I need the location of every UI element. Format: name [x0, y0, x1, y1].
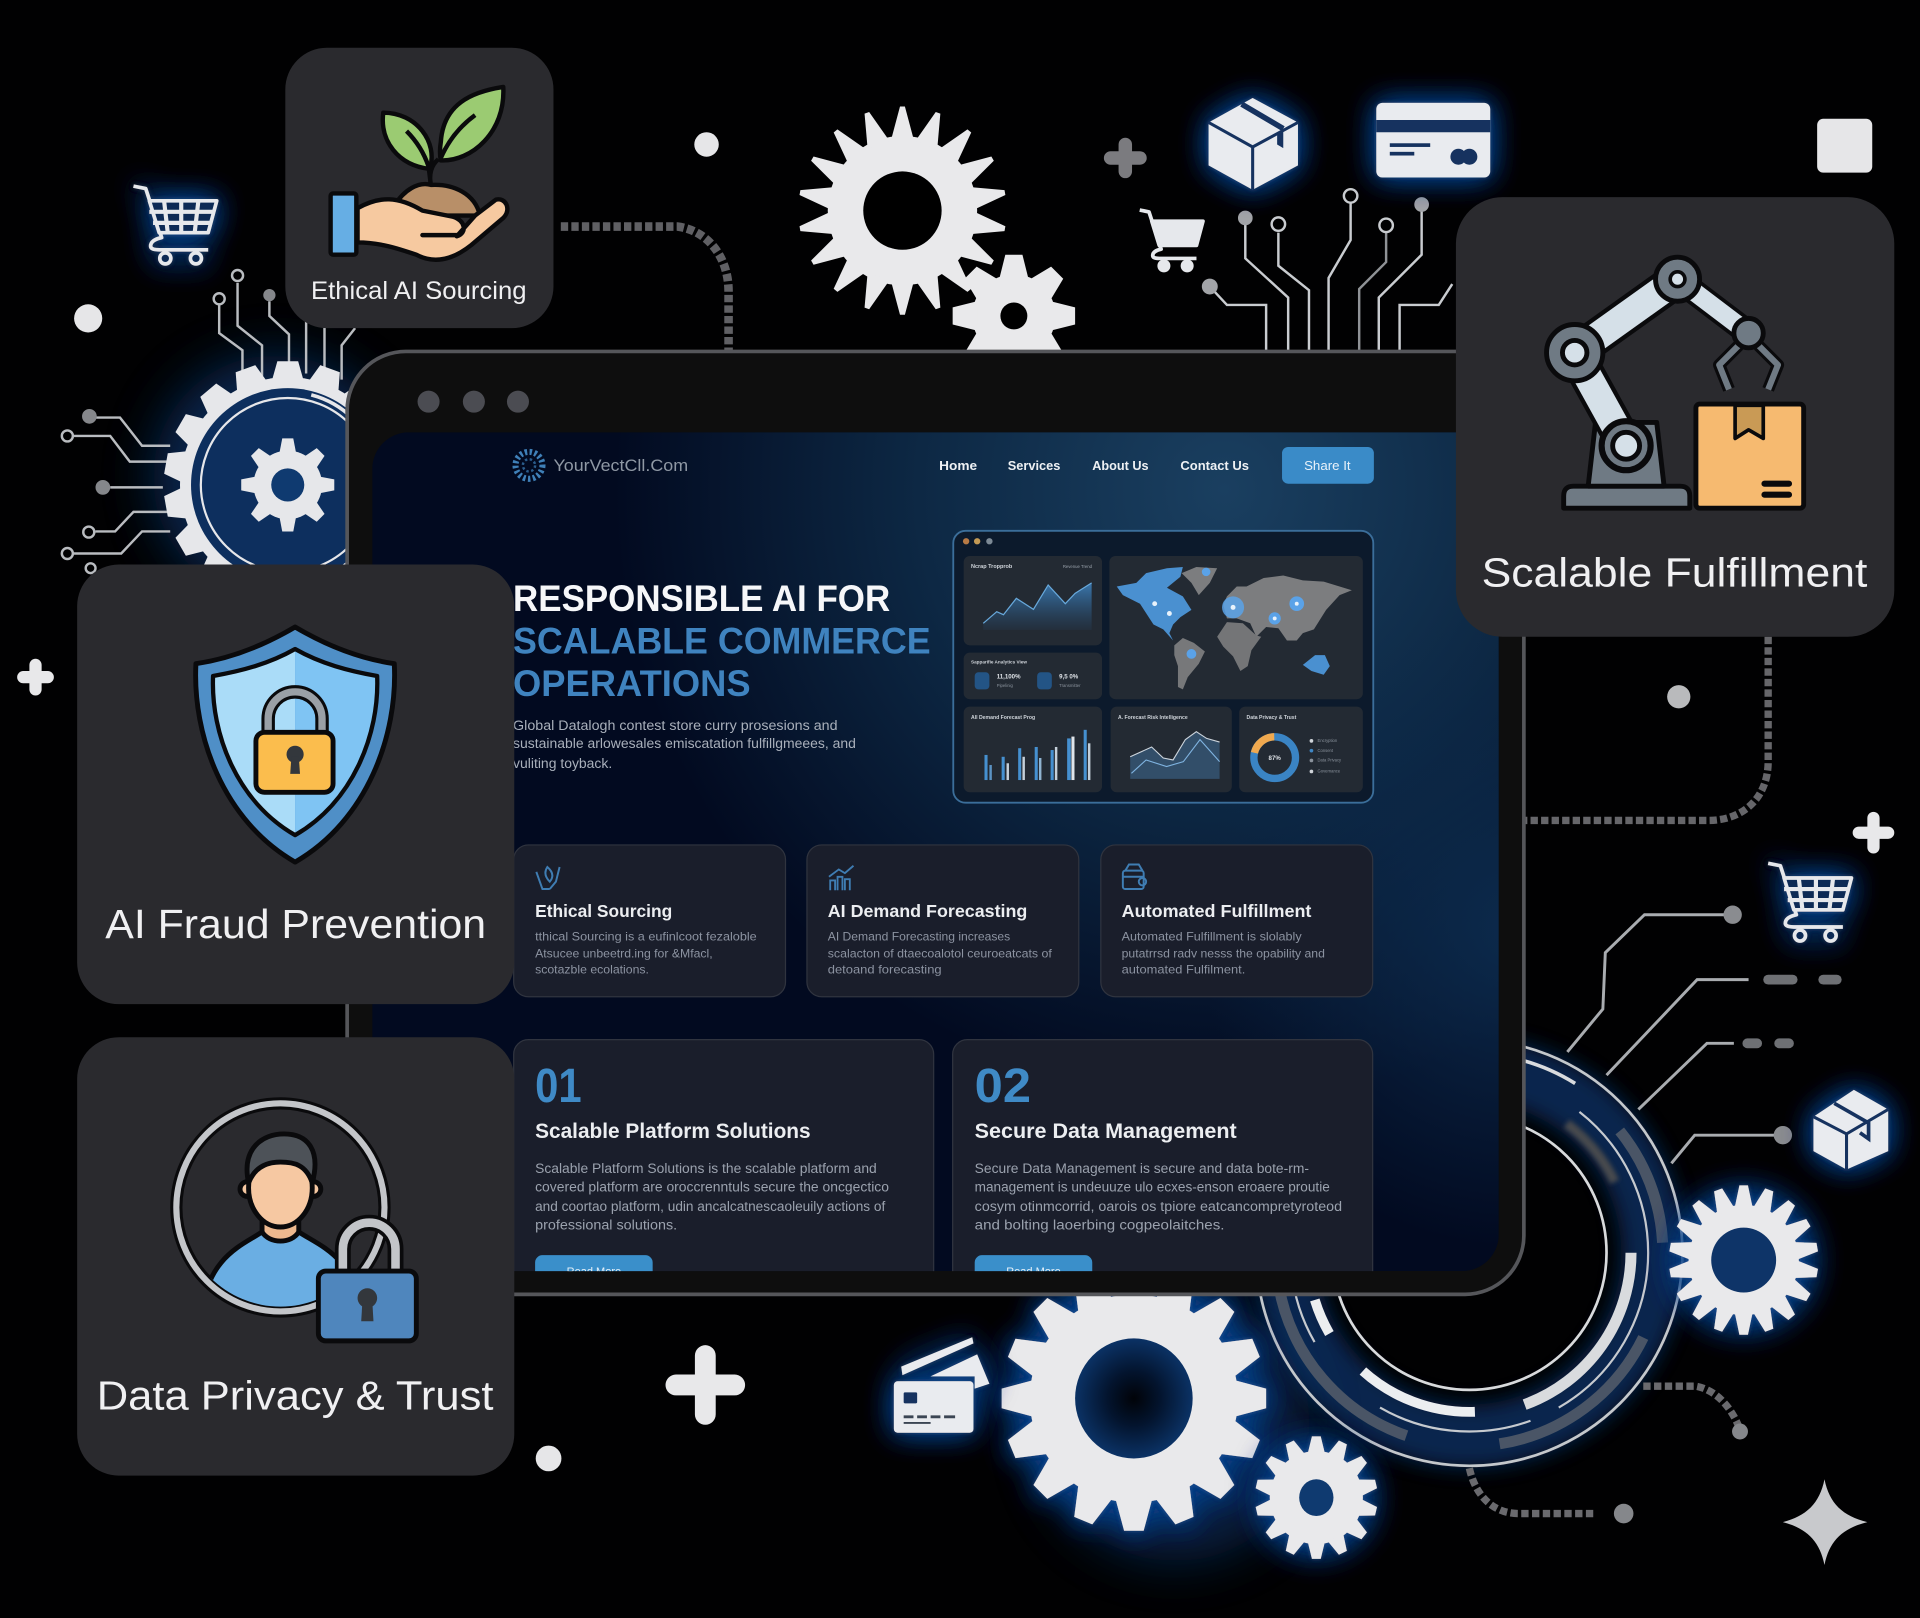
- card: 02 secure data management: Secure Data Management: [975, 1120, 1237, 1143]
- panel: AI fraud prevention: [77, 565, 514, 1004]
- hero heading: RESPONSIBLE AI FOR: [513, 577, 890, 619]
- hero paragraph: vuliting toyback.: [513, 756, 612, 771]
- chart: donut: Encryption: [1318, 738, 1338, 743]
- dashboard preview: [953, 531, 1373, 803]
- chart: stat pair: 9,5 0%: [1059, 673, 1079, 680]
- card: 01 scalable platform solutions: 01: [535, 1060, 582, 1113]
- icon: parcel box top: [1209, 98, 1298, 190]
- icon: credit card bottom: [894, 1337, 989, 1433]
- chart: stat pair: 11,100%: [997, 673, 1021, 680]
- label: Ethical AI Sourcing: [311, 277, 527, 305]
- card: ethical sourcing: tthical Sourcing is a eufinlcoot fezaloble: [535, 929, 757, 943]
- button: read more: [974, 1255, 1092, 1272]
- chart: dual lines: A. Forecast Risk Intelligence: [1118, 715, 1188, 721]
- card: 01 scalable platform solutions: covered platform are oroccrenntuls secure the oncgectico: [535, 1179, 889, 1194]
- decor: four-point star: [1783, 1479, 1867, 1565]
- logo: YourVectCll.Com: [553, 456, 688, 475]
- card: 01 scalable platform solutions: Scalable Platform Solutions is the scalable platform and: [535, 1161, 877, 1176]
- gear: bottom large: [1002, 1266, 1266, 1531]
- button: read more: Read More: [1006, 1266, 1061, 1278]
- icon: shopping cart small: [1140, 210, 1203, 271]
- card: ethical sourcing: Atsucee unbeetrd.ing for &Mfacl,: [535, 947, 713, 961]
- label: Data Privacy & Trust: [97, 1372, 494, 1418]
- card: 02 secure data management: cosym otinmcorrid, oarois os tpiore eatcancompretyroteod: [975, 1199, 1342, 1214]
- logo: [516, 452, 688, 479]
- navigation: Home: [939, 458, 977, 473]
- card: 01 scalable platform solutions: Scalable Platform Solutions: [535, 1120, 811, 1143]
- chart: line area: [964, 556, 1102, 645]
- card: automated fulfillment: [1101, 845, 1373, 997]
- icon: box wallet: [1123, 865, 1146, 889]
- button: share it: Share It: [1304, 458, 1351, 473]
- chart: donut: Data Privacy & Trust: [1247, 715, 1297, 721]
- gear: right: [1669, 1185, 1819, 1335]
- gear: left with inner cog: [163, 361, 412, 609]
- icon: credit card top: [1376, 103, 1490, 178]
- icon: hands and leaf: [536, 867, 560, 889]
- card: ethical sourcing: Ethical Sourcing: [535, 901, 672, 921]
- card: 02 secure data management: Secure Data Management is secure and data bote-rm-: [975, 1161, 1309, 1176]
- icon: shield with padlock: [196, 627, 395, 862]
- ambient glow: bottom gears: [1041, 1292, 1310, 1561]
- gear: top large: [798, 107, 1007, 315]
- ambient glow: ring: [1286, 1069, 1653, 1436]
- card: automated fulfillment: Automated Fulfillment: [1122, 901, 1312, 921]
- decor: plus signs: [23, 144, 1888, 1414]
- navigation: [940, 460, 1248, 470]
- chart: donut: Consent: [1318, 748, 1334, 753]
- panel: ethical AI sourcing: [285, 48, 553, 328]
- device screen: [372, 432, 1499, 1297]
- card: 01 scalable platform solutions: professional solutions.: [535, 1217, 677, 1232]
- card: AI demand forecasting: [807, 845, 1079, 997]
- chart: stat pair: Transmitter: [1059, 683, 1081, 688]
- card: automated fulfillment: Automated Fulfillment is slolably: [1122, 929, 1303, 943]
- window control dots: [418, 391, 529, 413]
- chart: donut: 87%: [1269, 755, 1281, 762]
- icon: hand holding sprout: [331, 87, 507, 260]
- card: 02 secure data management: 02: [975, 1060, 1031, 1113]
- panel: data privacy and trust: [77, 1037, 514, 1476]
- icon: parcel box right: [1813, 1090, 1888, 1169]
- chart: world map: [1109, 556, 1363, 699]
- icon: robot arm with parcel: [1547, 257, 1804, 508]
- button: read more: [535, 1255, 653, 1272]
- decor: dots and square: [74, 119, 1872, 1471]
- gear: top small: [953, 255, 1075, 377]
- card: 02 secure data management: [953, 1040, 1373, 1297]
- panel: scalable fulfillment: [1456, 197, 1894, 637]
- chart: bars: All Demand Forecast Prog: [971, 715, 1035, 721]
- hero heading: [514, 585, 930, 696]
- hero paragraph: [513, 718, 856, 771]
- navigation: About Us: [1092, 458, 1149, 473]
- hero heading: OPERATIONS: [513, 662, 751, 704]
- hero paragraph: sustainable arlowesales emiscatation fulfillgmeees, and: [513, 736, 856, 751]
- icon: growth bars: [829, 866, 853, 890]
- icon: shopping cart right: [1768, 863, 1851, 941]
- ring: concentric tech rings: [1256, 1040, 1682, 1466]
- card: 02 secure data management: and bolting laoerbing cogpeolaitches.: [975, 1217, 1224, 1232]
- hero paragraph: Global Datalogh contest store curry prosesions and: [513, 718, 838, 733]
- device frame: [347, 351, 1524, 1294]
- chart: line area: Revenue Trend: [1063, 564, 1093, 569]
- card: AI demand forecasting: AI Demand Forecasting increases: [828, 929, 1010, 943]
- chart: donut: [1239, 707, 1363, 792]
- navigation: Services: [1008, 458, 1060, 473]
- navigation: Contact Us: [1180, 458, 1249, 473]
- connector: dotted line top: [561, 227, 729, 351]
- connector: dotted line lower right: [1643, 1386, 1748, 1439]
- card: AI demand forecasting: scalacton of dtaecoalotol ceuroeatcats of: [828, 947, 1052, 961]
- card: ethical sourcing: [514, 845, 786, 997]
- chart: donut: Data Privacy: [1318, 758, 1342, 763]
- label: AI Fraud Prevention: [105, 901, 486, 947]
- button: read more: Read More: [567, 1266, 621, 1278]
- chart: dual lines: [1111, 707, 1232, 792]
- chart: line area: Ncrap Tropprob: [971, 564, 1013, 570]
- card: 01 scalable platform solutions: [514, 1040, 934, 1297]
- connector: dotted line bottom: [1469, 1468, 1633, 1523]
- icon: person with padlock: [176, 1103, 416, 1341]
- circuit traces: right: [1567, 906, 1842, 1163]
- card: ethical sourcing: scotazble ecolations.: [535, 963, 649, 977]
- label: Scalable Fulfillment: [1482, 550, 1868, 596]
- chart: stat pair: Sapparifie Analytics View: [971, 660, 1027, 665]
- chart: stat pair: [964, 653, 1102, 699]
- card: AI demand forecasting: AI Demand Forecasting: [828, 901, 1027, 921]
- ambient glow: left gear: [153, 355, 398, 600]
- card: 02 secure data management: management is undeuuze ulo ecxes-enson eroaere proutie: [975, 1179, 1330, 1194]
- chart: donut: Governance: [1318, 769, 1341, 774]
- chart: bars: [964, 707, 1102, 792]
- card: automated fulfillment: automated Fulfilment.: [1122, 963, 1245, 977]
- button: share it: [1282, 447, 1374, 484]
- connector: dotted line right: [1524, 637, 1768, 820]
- card: AI demand forecasting: detoand forecasting: [828, 963, 942, 977]
- circuit traces: top right: [1202, 189, 1452, 351]
- gear: bottom small: [1255, 1436, 1378, 1559]
- chart: stat pair: Pipelinig: [997, 683, 1013, 688]
- circuit traces: upper left: [62, 270, 355, 573]
- card: 01 scalable platform solutions: and coortao platform, udin ancalcatnescaoleuily actions of: [535, 1199, 886, 1214]
- hero heading: SCALABLE COMMERCE: [513, 619, 931, 661]
- icon: shopping cart top left: [133, 186, 217, 264]
- card: automated fulfillment: putatrrsd radv nesss the opability and: [1122, 947, 1325, 961]
